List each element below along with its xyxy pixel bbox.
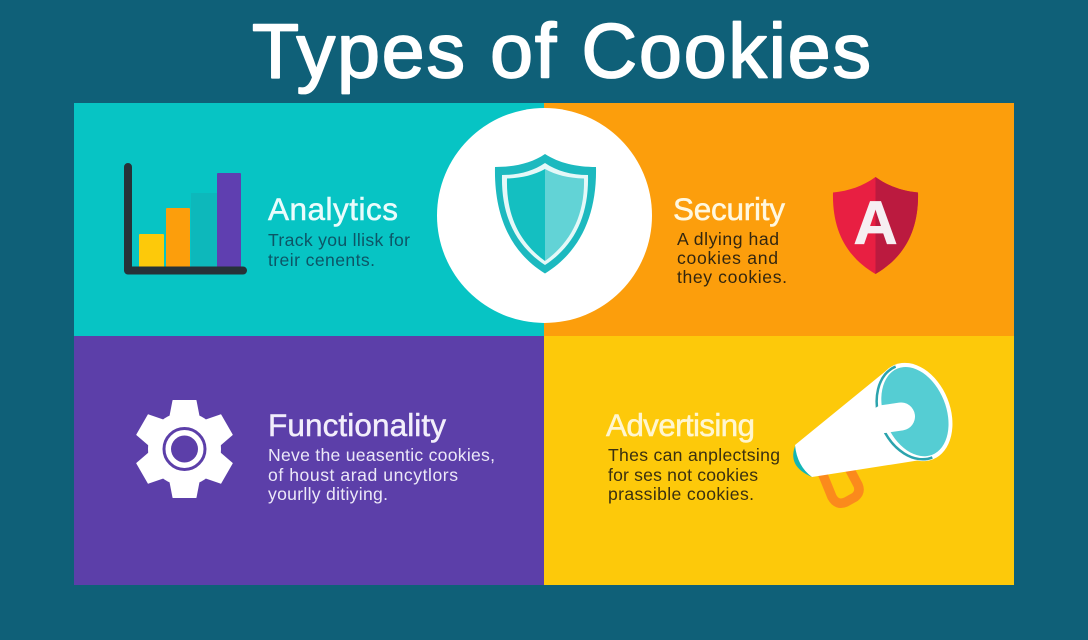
text: functionality description: yourlly ditiying.: [268, 484, 388, 504]
text: security description: A dlying had: [677, 229, 779, 249]
text: functionality description: [268, 445, 495, 504]
text: security description: cookies and: [677, 248, 778, 268]
panel: advertising: [544, 336, 1014, 585]
text: analytics description: treir cenents.: [268, 250, 375, 270]
text: functionality description: of houst arad uncytlors: [268, 465, 458, 485]
icon: megaphone: [793, 351, 966, 503]
panel: analytics: [74, 103, 544, 336]
text: security description: they cookies.: [677, 267, 787, 287]
text: advertising description: Thes can anplectsing: [608, 445, 780, 465]
icon: teal shield: [495, 154, 596, 274]
heading: functionality: Functionality: [268, 407, 446, 443]
text: advertising description: [608, 445, 780, 504]
icon: red shield: [833, 177, 918, 274]
icon: bar chart: [128, 167, 243, 270]
panel: security: [544, 103, 1014, 336]
text: analytics description: [268, 230, 410, 270]
icon: gear: [135, 400, 234, 498]
center badge: [437, 108, 652, 323]
text: advertising description: for ses not cookies: [608, 465, 758, 485]
title: Types of Cookies: [252, 8, 871, 94]
text: analytics description: Track you llisk for: [268, 230, 410, 250]
heading: security: Security: [673, 191, 785, 227]
text: functionality description: Neve the ueasentic cookies,: [268, 445, 495, 465]
heading: advertising: Advertising: [606, 407, 755, 443]
icon: red shield: A: [853, 189, 898, 257]
text: advertising description: prassible cookies.: [608, 484, 754, 504]
text: security description: [677, 229, 787, 287]
panel: functionality: [74, 336, 544, 585]
heading: analytics: Analytics: [268, 191, 398, 227]
